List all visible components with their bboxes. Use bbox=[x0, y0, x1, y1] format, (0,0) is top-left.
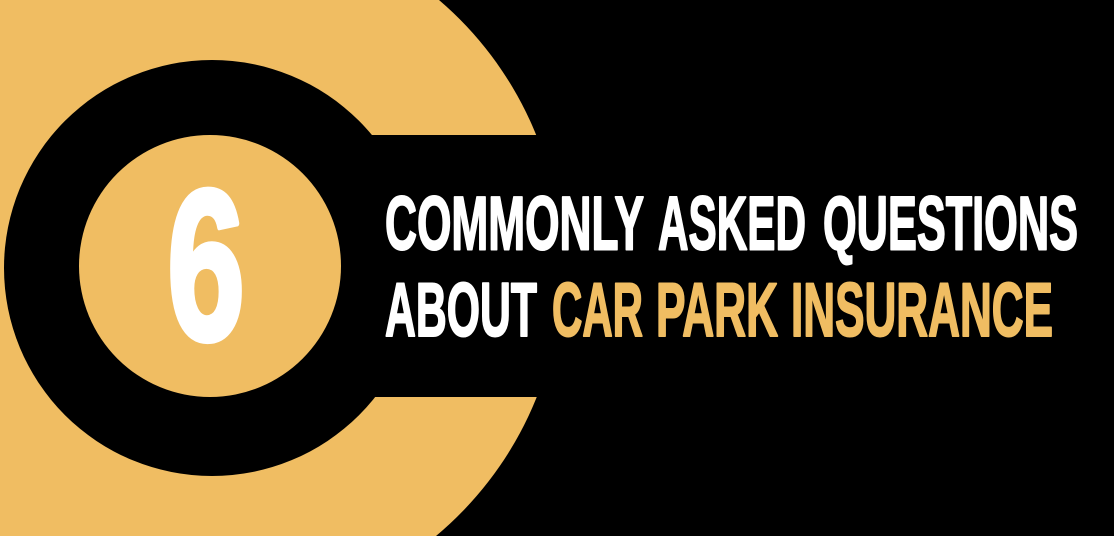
numeral 6: 6 bbox=[167, 146, 245, 385]
heading line 2: PARK bbox=[656, 268, 778, 353]
heading line 2: ABOUT bbox=[385, 268, 537, 353]
inner yellow circle bbox=[79, 135, 341, 397]
heading line 1 bbox=[385, 182, 1078, 266]
heading line 1: COMMONLY bbox=[385, 182, 644, 266]
heading line 1: ASKED bbox=[658, 182, 806, 266]
heading line 2 bbox=[385, 268, 1053, 353]
black ring bbox=[4, 60, 420, 476]
black band behind heading bbox=[340, 135, 1114, 397]
heading bbox=[385, 182, 1078, 353]
heading line 2: CAR bbox=[552, 268, 643, 353]
